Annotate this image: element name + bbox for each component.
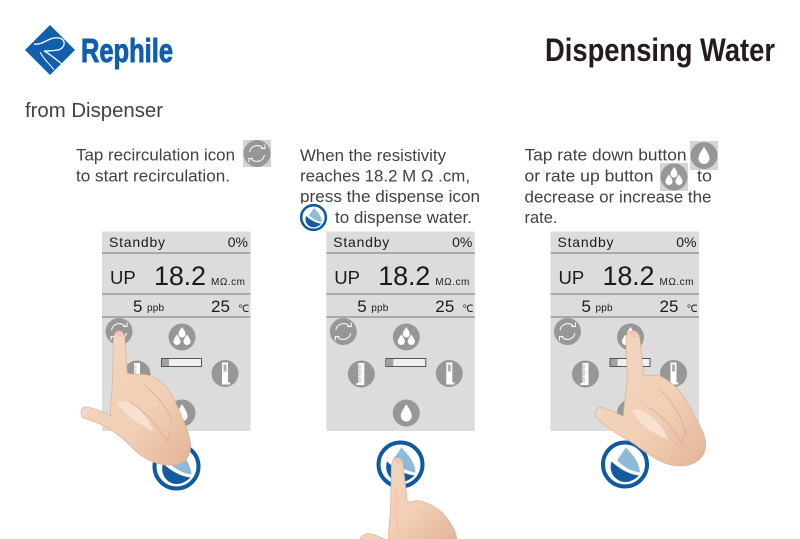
progress bar	[610, 358, 650, 366]
instruction text: step 3: or rate up button	[524, 166, 654, 186]
icon: cylinder right	[212, 360, 238, 387]
panel: step 3 screen: 18.2	[602, 261, 654, 291]
instruction text: step 3: rate.	[524, 208, 558, 227]
panel: step 2 screen: 25	[435, 297, 454, 316]
instruction text: step 3: decrease or increase the	[524, 188, 712, 206]
panel: step 2 screen	[326, 232, 475, 431]
panel: step 1 screen: 18.2	[154, 261, 206, 291]
panel: step 3 screen: 5	[582, 297, 591, 316]
icon: rate up inline	[660, 163, 688, 191]
panel: step 2 screen: 5	[357, 297, 367, 316]
instruction text: step 1: Tap recirculation icon	[76, 146, 235, 164]
panel: step 2 screen: UP	[334, 267, 360, 288]
panel: step 3 screen: ppb	[596, 303, 613, 314]
icon: rate up	[393, 324, 420, 350]
instruction text: step 3: Tap rate down button	[524, 146, 686, 164]
icon: dispense inline	[301, 205, 326, 230]
panel: step 3 screen: 25	[660, 297, 678, 316]
logo: Rephile	[25, 25, 173, 75]
hand: step 1	[81, 331, 191, 465]
icon: recirculation	[554, 318, 581, 345]
icon: cylinder left	[572, 360, 599, 388]
panel: step 2 screen: MΩ.cm	[435, 277, 469, 288]
icon: rate down	[393, 400, 420, 426]
icon: recirculation	[106, 318, 132, 345]
panel: step 2 screen: 18.2	[378, 261, 430, 291]
panel: step 1 screen: ppb	[147, 303, 164, 314]
panel: step 3 screen: Standby	[558, 234, 614, 250]
icon: cylinder right	[660, 360, 687, 387]
panel: step 2 screen: ppb	[371, 303, 389, 314]
logo wordmark: Rephile	[81, 32, 173, 69]
instruction text: step 2: to dispense water.	[335, 208, 472, 227]
instruction text: step 2: reaches 18.2 M Ω .cm,	[300, 166, 470, 186]
panel: step 3 screen: 0%	[676, 234, 696, 250]
panel: step 3 screen	[550, 232, 699, 431]
icon: rate down	[168, 400, 196, 426]
dispense button: step 3	[603, 442, 647, 486]
icon: rate up	[168, 324, 196, 350]
icon: cylinder right	[436, 360, 463, 387]
instruction text: step 1	[76, 140, 271, 186]
panel: step 1 screen: Standby	[109, 234, 165, 250]
panel: step 1 screen: UP	[110, 267, 136, 288]
icon: cylinder left	[348, 360, 375, 388]
dispense button: step 1	[154, 444, 198, 488]
panel: step 2 screen: ℃	[462, 304, 474, 315]
icon: rate down inline	[690, 141, 718, 170]
panel: step 1 screen: MΩ.cm	[211, 277, 245, 288]
progress bar	[386, 358, 426, 366]
icon: rate up	[617, 324, 644, 350]
panel: step 1 screen	[102, 232, 250, 431]
icon: recirculation inline	[243, 140, 271, 167]
panel: step 1 screen: 5	[133, 297, 142, 316]
panel: step 3 screen: ℃	[686, 304, 698, 315]
instruction text: step 3: to	[697, 166, 712, 186]
icon: recirculation	[330, 318, 357, 345]
panel: step 2 screen: Standby	[333, 234, 389, 250]
panel: step 3 screen: MΩ.cm	[660, 277, 694, 288]
instruction text: step 2	[298, 146, 483, 230]
icon: cylinder left	[124, 360, 150, 388]
logo diamond mark	[25, 25, 75, 75]
icon: rate down	[617, 400, 644, 426]
panel: step 2 screen: 0%	[452, 234, 472, 250]
panel: step 1 screen: 0%	[228, 234, 248, 250]
hand: step 2	[359, 458, 457, 539]
subtitle: from Dispenser	[25, 99, 163, 122]
panel: step 3 screen: UP	[558, 267, 584, 288]
progress bar	[162, 358, 202, 366]
hand: step 3	[595, 331, 706, 466]
panel: step 1 screen: 25	[211, 297, 230, 316]
instruction text: step 1: to start recirculation.	[76, 166, 230, 186]
panel: step 1 screen: ℃	[238, 304, 249, 315]
instruction text: step 2: When the resistivity	[300, 146, 446, 165]
instruction text: step 2: press the dispense icon	[300, 187, 480, 206]
dispense button: step 2	[378, 442, 422, 486]
instruction text: step 3	[524, 141, 718, 227]
